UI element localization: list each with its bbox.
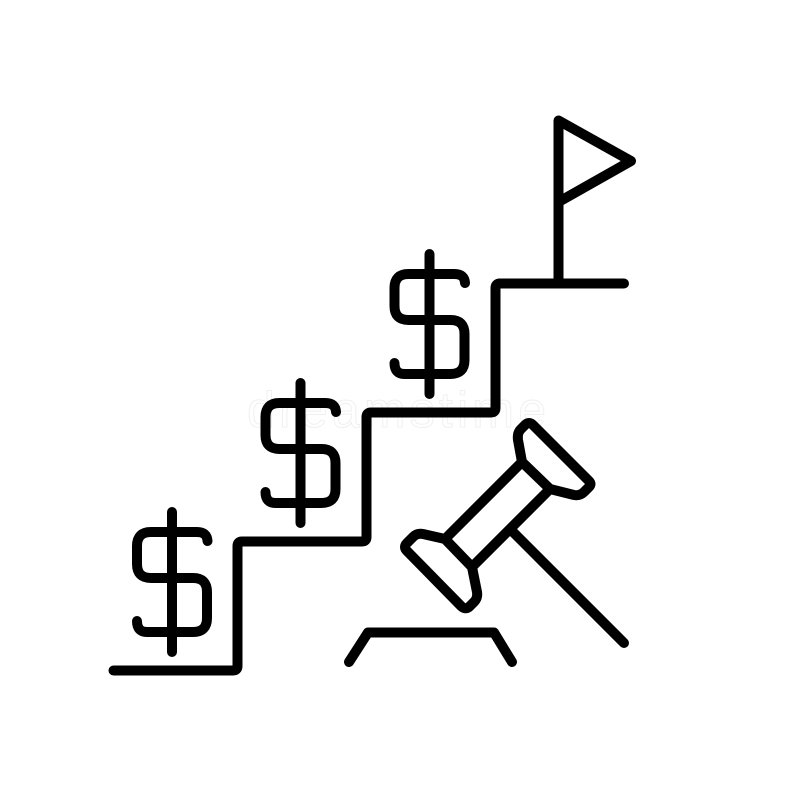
icon: gavel base (349, 632, 512, 662)
icon: dollar sign 3 (394, 254, 465, 394)
icon: dollar sign 2 (266, 383, 336, 523)
icon: gavel (405, 423, 624, 643)
icon: stair line (114, 284, 624, 670)
icon: dollar sign 1 (137, 512, 208, 652)
icon: flag (558, 120, 631, 283)
watermark: dreamstime (247, 382, 547, 438)
